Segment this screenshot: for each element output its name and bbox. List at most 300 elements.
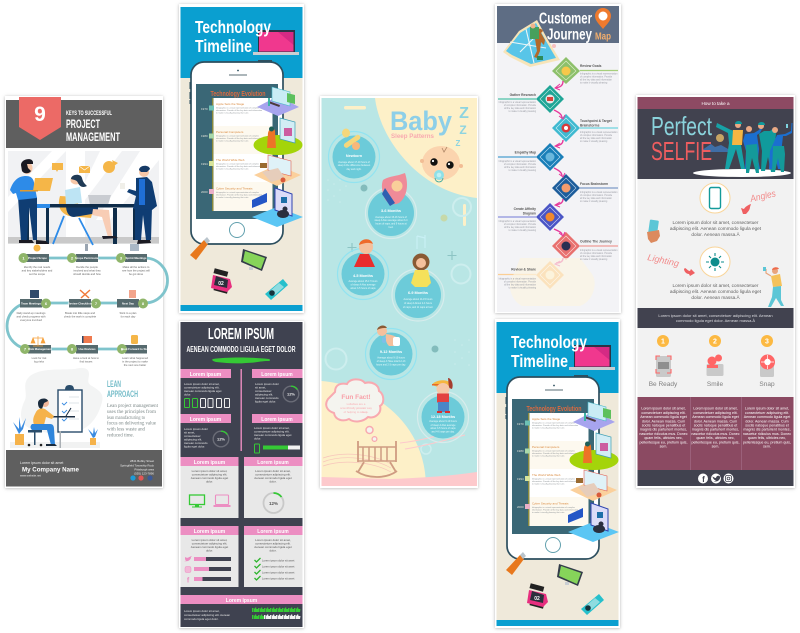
crib <box>356 441 397 477</box>
title: KEYS TO SUCCESSFUL <box>66 111 112 117</box>
step labels: Diagram <box>523 212 536 216</box>
step labels: Outline The Journey <box>580 240 612 244</box>
lean approach text: focus on delivering value <box>107 420 157 426</box>
panel: checklist: dolor. <box>269 548 277 552</box>
circle: 4-5 months: Average about 15-17 hours <box>349 280 378 283</box>
section: donut top right: Lorem ipsum <box>261 372 293 378</box>
maroon text columns: nascetur ridiculus mus. Donec <box>743 432 791 436</box>
title <box>66 111 120 144</box>
timeline entries: 1970 <box>517 422 524 426</box>
circle: 12-18 months: of sleep A Also average <box>431 424 456 427</box>
roadmap captions: Stick to a plan <box>120 311 137 315</box>
step descriptions: Infographic is a visual representation <box>580 72 618 76</box>
circle: 3-6 months: Average about 15-16 hours of <box>375 216 407 219</box>
section: bottom rating: Lorem ipsum dolor sit amet, <box>184 609 220 613</box>
step labels: Review Goals <box>580 64 602 68</box>
step descriptions: to make it visually pleasing <box>509 110 537 113</box>
fun fact cloud: of helping to sleep. <box>344 410 369 414</box>
title <box>511 332 587 371</box>
timeline entries: 1970 <box>201 107 208 111</box>
lean approach text <box>107 379 159 438</box>
roadmap captions: should decide and how <box>73 272 101 276</box>
timeline entries: Infographic is a visual representation of complex <box>532 450 575 452</box>
timeline entries: information. Provide all the key data and information <box>216 137 262 140</box>
handwritten note: lighting: Lighting <box>647 252 680 269</box>
text block: lighting: Lorem ipsum dolor sit amet, consectetuer <box>673 283 759 288</box>
icon: sun circle <box>700 247 730 277</box>
panel: devices: consectetuer adipiscing elit. <box>192 472 227 476</box>
maroon text columns: dolor. Aenean massa. Cum <box>745 420 789 424</box>
baby face with pacifier <box>420 146 463 182</box>
panel: devices: Aenean commodo ligula eget <box>191 476 228 480</box>
step: smile: Smile <box>707 381 724 388</box>
timeline entries: 1980 <box>201 134 208 138</box>
maroon text columns: Lorem ipsum dolor sit amet, <box>745 406 789 410</box>
roadmap step labels: Sprint Meetings <box>126 256 147 260</box>
roadmap captions: set the scope <box>29 272 45 276</box>
panel: devices: Lorem ipsum dolor sit amet, <box>192 469 228 473</box>
handwritten note: angles <box>741 188 777 214</box>
fun fact cloud: Lullabies are a <box>347 402 366 406</box>
title: Customer <box>539 10 592 28</box>
section: bottom rating <box>180 595 302 621</box>
green brush stroke <box>212 358 270 363</box>
panel: lorem ipsum dark statistics infographic <box>179 321 304 628</box>
section: donut middle left <box>180 414 231 448</box>
maroon text columns: nascetur ridiculus mus. Donec <box>691 432 740 436</box>
section: progress bar <box>252 414 302 453</box>
group of friends illustration <box>716 121 792 173</box>
fun fact cloud: scientifically proven way <box>340 406 372 410</box>
dark text band: Lorem ipsum dolor sit amet, consectetuer adipiscing elit. Aenean <box>658 313 773 318</box>
roadmap step numbers: 7 <box>95 301 98 306</box>
laptop icon <box>569 345 615 370</box>
maroon text columns: Aenean commodo ligula eget <box>692 415 739 419</box>
maroon text columns: magnis dis parturient montes, <box>692 428 739 432</box>
timeline entries: to make it visually pleasing that suits <box>216 168 248 170</box>
timeline entries: 1980 <box>517 449 524 453</box>
sleeping Z letters: Z <box>456 139 461 148</box>
maroon text columns: sociis natoque penatibus et <box>745 424 789 428</box>
title: AENEAN COMMODO LIGULA EGET DOLOR <box>186 345 296 354</box>
section: phones: dolor. <box>184 392 191 396</box>
panel: perfect selfie infographic <box>636 95 795 488</box>
timeline entries: Infographic is a visual representation of complex <box>532 506 575 509</box>
step: be ready: Be Ready <box>649 381 678 388</box>
panel: checklist: Lorem ipsum dolor sit amet <box>262 576 295 580</box>
step descriptions: all the key data and information <box>504 107 537 110</box>
timeline entries: 2000 <box>201 190 208 194</box>
section: donut top right: adipiscing elit. <box>255 392 273 396</box>
panel: project management infographic <box>5 96 168 488</box>
footer with social icons: f <box>702 475 705 484</box>
step descriptions: to make it visually pleasing <box>580 82 608 84</box>
circle: 3-6 months: sleep A Also average about 3-4 <box>375 219 408 222</box>
roadmap captions: find issues <box>80 360 93 364</box>
section: donut top right: consectetuer <box>255 389 272 393</box>
timeline entries: Cyber Security and Threats <box>532 502 569 506</box>
panel: checklist: Lorem ipsum dolor sit amet, <box>255 538 291 542</box>
title: LOREM IPSUM <box>208 326 274 343</box>
office team illustration <box>8 151 159 245</box>
text block: angles: Lorem ipsum dolor sit amet, consectetuer <box>673 220 759 225</box>
roadmap captions: Make all the actions to <box>123 265 150 269</box>
circle: newborn <box>328 128 380 182</box>
roadmap captions: log risks <box>34 360 45 364</box>
maroon text columns: Aenean commodo ligula eget <box>744 415 790 419</box>
text block: lighting <box>670 283 762 300</box>
section: donut top right <box>252 369 302 404</box>
lean approach text: LEAN <box>107 379 121 390</box>
lean approach text: lean manufacturing to <box>107 414 145 421</box>
timeline entries: information. Provide all the key data and information <box>216 165 262 168</box>
section: donut top right: ligula eget dolor. <box>255 400 276 404</box>
section: donut top right: Lorem ipsum dolor <box>255 382 279 386</box>
text block: angles: adipiscing elit. Aenean commodo ligula eget <box>670 226 762 231</box>
panel: social bars: Aenean commodo ligula eget <box>191 545 228 549</box>
title: Timeline <box>511 351 568 371</box>
section: phones: Lorem ipsum dolor sit amet, <box>184 382 220 386</box>
step descriptions: all the key data and information <box>580 78 613 82</box>
illustration: hand holding phone <box>647 220 660 243</box>
circle: 3-6 months <box>366 173 416 238</box>
step labels: Create Affinity <box>514 207 536 211</box>
timeline entries <box>517 413 588 526</box>
timeline entries: Apple Sets the Stage <box>532 417 561 421</box>
panel: large donut: Lorem ipsum dolor sit amet, <box>255 469 291 473</box>
circle: 12-18 months <box>418 378 468 442</box>
text block: lighting: adipiscing elit. Aenean commodo ligula eget <box>670 289 762 294</box>
magenta arrows <box>554 81 565 266</box>
title: SELFIE <box>651 136 712 166</box>
timeline entries: 1994 <box>517 477 524 481</box>
maroon text columns: sem. <box>660 444 667 448</box>
title: Baby <box>390 106 452 136</box>
maroon text columns: sem. <box>712 444 719 448</box>
section: phones: consectetuer adipiscing elit. <box>184 386 220 390</box>
title: Technology <box>195 17 271 37</box>
panel: large donut: consectetuer adipiscing elit. <box>255 472 291 476</box>
timeline entries: Infographic is a visual representation of complex <box>216 162 259 166</box>
icon: phone circle <box>700 183 730 213</box>
panel: social bars: f <box>187 578 190 584</box>
footer: My Company Name <box>22 468 80 474</box>
timeline entries: to make it visually pleasing that suits <box>532 426 564 430</box>
map illustration with traveller <box>503 20 560 67</box>
maroon text columns: quam felis, ultricies nec, <box>696 436 735 440</box>
panel: social bars <box>180 526 238 587</box>
timeline entries: to make it visually pleasing that suits <box>532 482 564 486</box>
timeline entries: Infographic is a visual representation of complex <box>532 422 575 424</box>
maroon text columns: consectetuer adipiscing elit. <box>693 411 738 415</box>
lean approach illustration <box>10 368 103 448</box>
timeline entries: The World Wide Web <box>216 158 245 162</box>
device icons: 02 <box>218 281 224 287</box>
panel: baby sleep patterns infographic <box>320 96 478 488</box>
timeline entries: information. Provide all the key data and information <box>216 109 262 112</box>
sleeping Z letters: Z <box>459 123 467 137</box>
circle: newborn: Average about 17-19 hours of <box>338 161 370 164</box>
maroon text columns: pellentesque eu, pretium quis, <box>743 440 791 444</box>
title: MANAGEMENT <box>66 132 120 144</box>
step descriptions: Infographic is a visual representation <box>580 131 618 134</box>
circle: 3-6 months: 3-6 Months <box>381 209 401 213</box>
header band <box>6 100 162 148</box>
title: Timeline <box>195 36 252 56</box>
step descriptions: to make it visually pleasing <box>509 286 537 290</box>
step labels: Focus Brainstorm <box>580 182 608 186</box>
step descriptions: of complex information. Provide <box>580 134 613 137</box>
step descriptions: all the key data and information <box>504 166 537 169</box>
section: phones: Lorem ipsum <box>190 372 222 378</box>
circle: 4-5 months: 4-5 Months <box>353 274 373 278</box>
circle: 4-5 months <box>338 239 388 300</box>
panel: checklist: consectetuer adipiscing elit. <box>255 542 291 546</box>
circle: 4-5 months: about 3-5 hours of naps <box>350 287 376 290</box>
section: bottom rating: consectetuer adipiscing elit. Aenean <box>184 613 231 617</box>
maroon text columns: Lorem ipsum dolor sit amet, <box>693 406 738 410</box>
panel: devices <box>180 457 238 518</box>
isometric scenes <box>252 87 303 227</box>
step: be ready: 1 <box>661 338 665 346</box>
circle: 9-12 months: hours and 2-3 naps per day. <box>376 364 406 366</box>
project roadmap path <box>7 258 168 349</box>
step: snap <box>759 335 775 388</box>
timeline entries: Personal Computers <box>216 130 244 134</box>
step labels: Review & Share <box>511 268 536 272</box>
roadmap icons <box>30 244 139 346</box>
device icons: 02 <box>534 596 540 602</box>
panel: large donut: 12% <box>269 501 278 506</box>
dark text band: commodo ligula eget dolor. Aenean massa.Â <box>676 318 755 323</box>
title: Sleep Patterns <box>391 133 434 140</box>
maroon text columns: sociis natoque penatibus et <box>642 424 685 428</box>
circle: newborn: Newborn <box>346 154 363 158</box>
timeline entries: information. Provide all the key data and information <box>532 452 578 455</box>
handwritten note: angles: Angles <box>748 188 777 205</box>
timeline entries: Personal Computers <box>532 445 560 449</box>
circle: 9-12 months <box>366 326 416 380</box>
roadmap captions: Learn what happened <box>122 356 148 360</box>
panel: social bars: consectetuer adipiscing elit. <box>192 542 227 546</box>
roadmap step numbers: 2 <box>71 256 74 260</box>
circle: newborn: day and night. <box>346 168 362 171</box>
roadmap captions: Break into little steps and <box>65 311 96 315</box>
roadmap captions: Look for risk <box>32 356 47 360</box>
step descriptions: Infographic is a visual representation <box>580 249 618 252</box>
lean approach text: APPROACH <box>107 389 138 400</box>
circle: 6-9 months: Average about 14-15 hours <box>404 298 433 301</box>
maroon text columns: consectetuer adipiscing elit. <box>641 411 686 415</box>
step descriptions: to make it visually pleasing <box>509 229 537 232</box>
roadmap step numbers: 7 <box>24 346 27 352</box>
section: donut middle left: Aenean commodo <box>184 441 208 445</box>
title <box>539 10 611 44</box>
section: donut middle left: 12% <box>217 436 225 442</box>
roadmap step numbers: 8 <box>71 346 74 352</box>
step: smile <box>706 335 724 388</box>
connector lines <box>498 70 618 274</box>
fun fact cloud <box>326 379 383 441</box>
title: Map <box>595 32 611 42</box>
step: be ready <box>649 335 678 388</box>
circle: 6-9 months <box>392 254 444 321</box>
roadmap step numbers: 3 <box>120 256 123 260</box>
maroon text columns: quam felis, ultricies nec, <box>748 436 786 440</box>
roadmap captions: check the work is complete <box>64 314 97 318</box>
step labels: Touchpoint & Target <box>580 119 613 123</box>
circle: 6-9 months: of naps, and 11 naps at bed. <box>403 306 433 309</box>
maroon text columns: sem. <box>763 444 771 448</box>
circle: newborn: sleep A the difference between <box>338 164 371 167</box>
section: donut top right: Aenean commodo <box>255 396 279 400</box>
section: progress bar: dolor. <box>254 436 261 440</box>
section: donut middle left: consectetuer <box>184 434 201 438</box>
timeline entries: to make it visually pleasing that suits <box>532 511 564 514</box>
phone frame <box>190 60 283 244</box>
device icons <box>506 552 604 615</box>
panel: checklist: Aenean commodo ligula eget <box>254 545 292 549</box>
step descriptions: of complex information. Provide <box>580 76 613 78</box>
maroon text columns: quam felis, ultricies nec, <box>644 436 683 440</box>
roadmap step labels: Look Forward to Steps <box>121 347 152 351</box>
timeline entries: 1994 <box>201 162 208 166</box>
lean approach text: reduced time. <box>107 432 134 438</box>
title: PROJECT <box>66 119 100 131</box>
maroon text columns: sociis natoque penatibus et <box>694 424 737 428</box>
panel: large donut: Aenean commodo ligula eget <box>254 476 292 480</box>
maroon text columns: nascetur ridiculus mus. Donec <box>639 432 688 436</box>
maroon text columns: pellentesque eu, pretium quis, <box>692 440 739 444</box>
circle: 9-12 months: of sleep A Have total 12-13 <box>377 360 406 363</box>
lean approach text: Lean project management <box>107 403 159 409</box>
panel: social bars: Lorem ipsum dolor sit amet, <box>192 538 228 542</box>
step descriptions: Infographic is a visual representation <box>499 160 537 163</box>
timeline entries: Infographic is a visual representation of complex <box>216 106 259 110</box>
footer: Lorem ipsum dolor sit amet <box>20 461 63 465</box>
background decoration <box>322 98 477 486</box>
step descriptions: to make it visually pleasing <box>509 169 537 172</box>
circle: 3-6 months: bed. <box>389 226 394 229</box>
step: smile: 2 <box>713 338 717 346</box>
text block: angles <box>670 220 762 237</box>
circle: 9-12 months: Average about 9-10 hours <box>377 356 406 360</box>
timeline entries: to make it visually pleasing that suits <box>216 140 248 142</box>
timeline entries: Infographic is a visual representation of complex <box>216 191 259 194</box>
roadmap captions: see how the project will <box>122 268 150 272</box>
timeline entries: information. Provide all the key data and information <box>216 194 262 196</box>
roadmap step labels: Next Day <box>122 302 134 306</box>
roadmap step labels: Review Checklists <box>68 302 93 306</box>
roadmap step labels: Use Reviews <box>78 347 96 351</box>
panel: checklist: Lorem ipsum dolor sit amet <box>262 570 295 574</box>
roadmap captions: and key stakeholders and <box>22 268 53 272</box>
timeline entries: information. Provide all the key data and information <box>532 424 578 427</box>
timeline entries: Apple Sets the Stage <box>216 102 245 106</box>
timeline entries: Cyber Security and Threats <box>216 186 253 190</box>
step descriptions: of complex information. Provide <box>504 280 537 284</box>
step descriptions: to make it visually pleasing <box>580 258 608 261</box>
roadmap step labels: Project Scope <box>28 256 47 260</box>
maroon text columns: magnis dis parturient montes, <box>640 428 687 432</box>
section: donut top right: sit amet, <box>255 386 266 390</box>
roadmap step numbers <box>22 256 145 352</box>
timeline entries <box>201 98 272 211</box>
step labels: Gather Research <box>510 93 536 97</box>
maroon text columns: consectetuer adipiscing elit. <box>745 411 789 415</box>
roadmap captions: in the project to make <box>122 360 148 364</box>
step descriptions: of complex information. Provide <box>580 194 613 197</box>
roadmap captions: everyone involved <box>20 318 42 322</box>
step descriptions: to make it visually pleasing <box>580 200 608 203</box>
section: phones <box>180 369 231 408</box>
title <box>195 17 271 56</box>
title: Journey <box>547 26 592 44</box>
timeline screen heading: Technology Evolution <box>526 406 582 413</box>
maroon text columns: dolor. Aenean massa. Cum <box>694 420 737 424</box>
panel: large donut <box>244 457 302 518</box>
red pennant with number 9: 9 <box>34 103 46 126</box>
roadmap captions: be got done <box>129 272 144 276</box>
step descriptions: all the key data and information <box>580 255 613 258</box>
step descriptions: all the key data and information <box>504 284 537 286</box>
circle: 12-18 months: about 3-5 hours of naps <box>430 427 456 430</box>
step descriptions: all the key data and information <box>580 197 613 200</box>
location pin <box>595 8 611 29</box>
circle: 12-18 months: 12-18 Months <box>431 415 455 419</box>
dark text band <box>638 308 794 328</box>
circle: 4-5 months: of sleep A Also average <box>351 284 376 286</box>
step descriptions: all the key data and information <box>580 137 613 140</box>
step labels: Brainstorms <box>580 124 600 128</box>
laptop icon <box>253 30 299 55</box>
roadmap captions: Decide the people <box>76 265 98 269</box>
step: snap: Snap <box>759 381 775 388</box>
panel: technology timeline (top) <box>179 4 304 313</box>
panel: devices: Lorem ipsum <box>194 460 226 466</box>
text block: angles: dolor. Aenean massa.Â <box>691 231 740 237</box>
step descriptions: of complex information. Provide <box>504 104 537 107</box>
isometric scenes <box>568 402 619 542</box>
faint house illustration <box>510 258 595 306</box>
panel: checklist: Lorem ipsum <box>257 529 289 535</box>
step labels: Empathy Map <box>515 150 536 154</box>
step descriptions: Infographic is a visual representation <box>499 278 537 280</box>
roadmap captions: Daily stand-up meetings <box>17 311 46 315</box>
device icons <box>190 237 288 300</box>
roadmap captions: for each day <box>121 314 136 318</box>
header band <box>497 6 619 43</box>
sleeping Z letters: Z <box>459 105 469 122</box>
maroon text columns <box>638 397 794 470</box>
circle: 12-18 months: and 4-6 naps per day. <box>431 430 455 434</box>
step descriptions: of complex information. Provide <box>504 223 537 226</box>
section: progress bar: Lorem ipsum <box>261 417 293 423</box>
roadmap captions: the next one better <box>124 363 146 367</box>
lean approach text: uses the principles from <box>107 408 156 415</box>
divider <box>240 369 242 451</box>
maroon text columns: Lorem ipsum dolor sit amet, <box>641 406 686 410</box>
panel: social bars: Lorem ipsum <box>194 529 226 535</box>
step descriptions: of complex information. Provide <box>504 163 537 166</box>
timeline screen heading: Technology Evolution <box>210 91 266 98</box>
illustration: person taking selfie <box>763 267 784 307</box>
roadmap step labels <box>18 253 152 354</box>
panel: large donut: Lorem ipsum <box>257 460 289 466</box>
timeline entries: Infographic is a visual representation of complex <box>216 134 259 138</box>
step descriptions: Infographic is a visual representation <box>580 191 618 194</box>
step descriptions: of complex information. Provide <box>580 252 613 255</box>
